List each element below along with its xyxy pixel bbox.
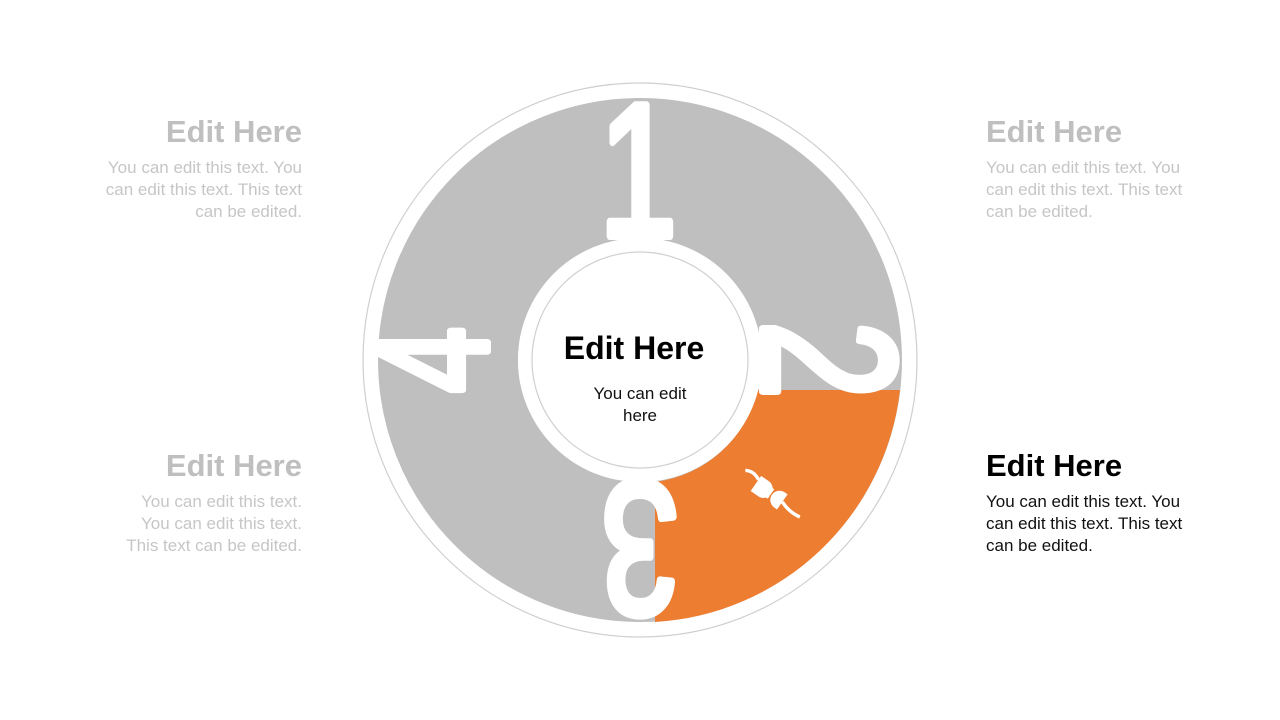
- text block: top left: Edit Here: [166, 114, 302, 149]
- outer thin ring: [363, 83, 917, 637]
- text block: top right: Edit Here: [986, 114, 1122, 149]
- text block: top right: [986, 114, 1182, 221]
- text block: bottom right (active): [986, 448, 1182, 555]
- text block: bottom left: This text can be edited.: [126, 536, 302, 555]
- text block: bottom right (active): You can edit this text. You can edit this text. This text can be edited.: [986, 492, 1182, 555]
- number 1: 1: [599, 65, 677, 277]
- number 4: 4: [343, 327, 521, 393]
- center circle: here: [623, 406, 657, 425]
- icon: plug: [737, 467, 806, 523]
- gray donut: [448, 168, 832, 552]
- number 2: 2: [722, 321, 934, 399]
- text block: bottom right (active): Edit Here: [986, 448, 1122, 483]
- number 3: 3: [601, 442, 679, 654]
- white gap around center: [518, 238, 762, 482]
- text block: bottom left: [126, 448, 302, 555]
- text block: top left: You can edit this text. You can edit this text. This text can be edited.: [106, 158, 302, 221]
- center circle: [532, 252, 748, 468]
- center circle: Edit Here: [564, 330, 704, 366]
- orange segment (step 3): [655, 390, 900, 622]
- center circle: You can edit: [594, 384, 687, 403]
- text block: top right: You can edit this text. You can edit this text. This text can be edited.: [986, 158, 1182, 221]
- text block: top left: [106, 114, 302, 221]
- text block: bottom left: Edit Here: [166, 448, 302, 483]
- text block: bottom left: You can edit this text.: [141, 514, 302, 533]
- text block: bottom left: You can edit this text.: [141, 492, 302, 511]
